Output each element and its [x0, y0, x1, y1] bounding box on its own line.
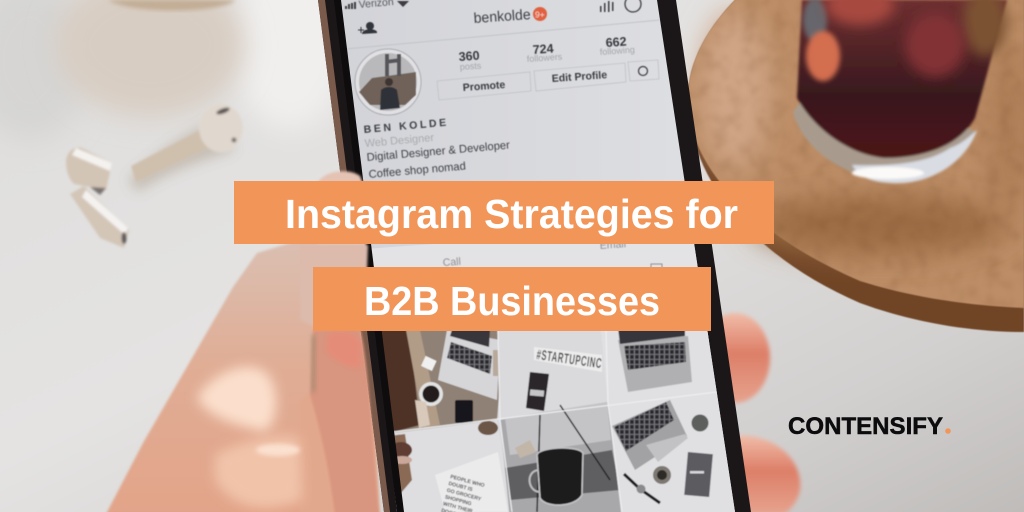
- photo: startup sign and phone: [498, 331, 602, 412]
- bio: BEN KOLDE: [363, 117, 449, 136]
- bio: Digital Designer & Developer: [366, 139, 511, 164]
- photo: open book and tea: PEOPLE WHO: [449, 474, 485, 489]
- icon: add person: [358, 22, 377, 34]
- right hand fingers: [700, 313, 800, 512]
- username header: [345, 7, 660, 49]
- profile stats: 360: [458, 49, 480, 64]
- profile stats: 662: [605, 35, 627, 50]
- buttons: Edit Profile: [551, 69, 608, 85]
- earbuds: [66, 104, 243, 248]
- logo: Contensify: CONTENSIFY: [788, 413, 943, 440]
- hand light highlights: [197, 367, 302, 507]
- photo: desk with laptop and coffee: [382, 331, 500, 434]
- left hand palm behind phone: [105, 240, 380, 512]
- status bar: [345, 0, 641, 12]
- photo: open book and tea: GO GROCERY: [446, 488, 482, 503]
- username header: benkolde: [473, 7, 531, 27]
- title banner line 1: Instagram Strategies for: [285, 191, 738, 237]
- contact actions: Call: [442, 256, 461, 269]
- title banner line 2: [313, 267, 711, 331]
- profile stats: posts: [459, 60, 482, 72]
- profile stats: followers: [526, 52, 563, 64]
- buttons: [437, 60, 659, 100]
- photo: startup sign and phone: #STARTUPCINC: [536, 346, 603, 371]
- phone screen: [330, 0, 750, 512]
- smartphone: [318, 0, 751, 512]
- profile photo: [355, 49, 421, 115]
- photo: laptop on white: [618, 331, 717, 392]
- cork coaster: [688, 0, 1024, 332]
- photo: coffee cup on pier: [500, 402, 625, 512]
- photo: laptop, watch and notebook: [612, 392, 735, 512]
- contact actions: Email: [599, 238, 626, 252]
- title banner line 2: B2B Businesses: [364, 278, 660, 324]
- bio: Coffee shop nomad: [368, 161, 466, 181]
- buttons: Promote: [462, 79, 506, 94]
- blurred cup shadow, top left: [55, 0, 245, 117]
- bio: [363, 117, 511, 181]
- photo grid: [382, 331, 735, 512]
- left hand thumb over phone: [300, 171, 379, 512]
- photo: open book and tea: [394, 420, 508, 512]
- username header: 9+: [535, 10, 545, 20]
- bio: Web Designer: [364, 132, 435, 150]
- contact actions: [442, 244, 663, 267]
- title banner line 1: [234, 181, 774, 244]
- phone side highlight: [334, 0, 404, 512]
- profile stats: 724: [532, 42, 554, 57]
- profile stats: following: [599, 45, 635, 57]
- photo: open book and tea: DOUBT IS: [448, 481, 474, 493]
- glass of iced coffee: [793, 0, 1007, 183]
- phone body: [318, 0, 751, 512]
- photo: open book and tea: SHOPPING: [444, 494, 472, 507]
- profile stats: [458, 35, 635, 72]
- grid gap lines: [385, 330, 733, 512]
